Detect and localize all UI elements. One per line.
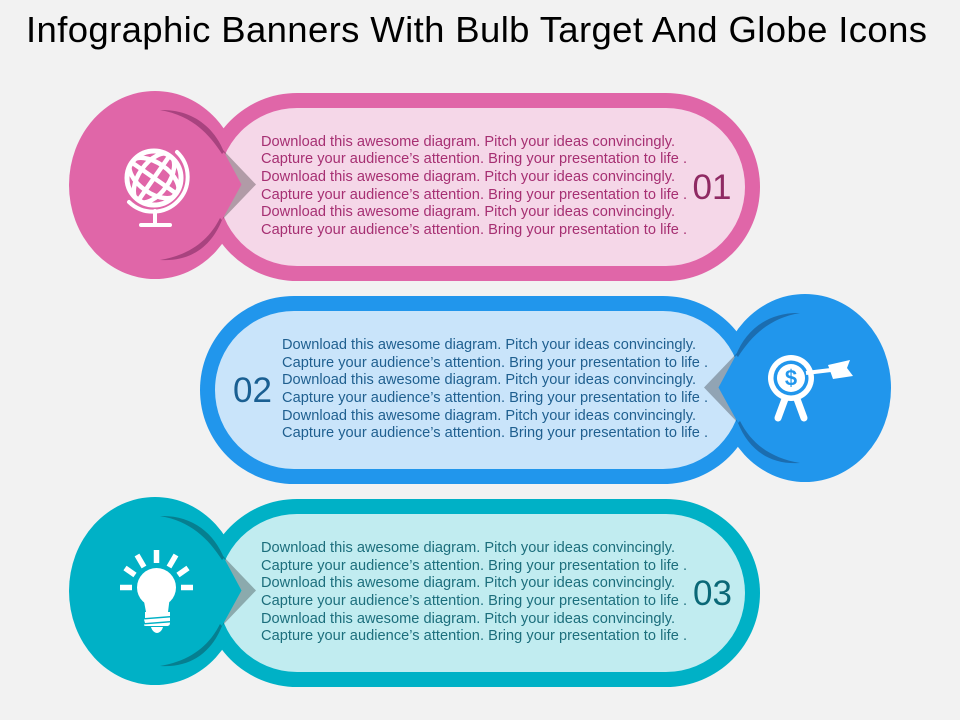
crescent shadows <box>160 516 224 666</box>
text block: Capture your audience’s attention. Bring your presentation to life . <box>282 425 708 441</box>
panel: banner 02 target <box>200 294 891 484</box>
badge pointer <box>205 546 242 636</box>
text block: Capture your audience’s attention. Bring your presentation to life . <box>282 390 708 406</box>
panel: banner 01 globe <box>69 91 760 281</box>
inner pill <box>218 108 745 266</box>
outer pill <box>203 499 760 687</box>
text block: Download this awesome diagram. Pitch your ideas convincingly. <box>282 408 696 424</box>
badge pointer <box>718 343 755 433</box>
number 02: 02 <box>233 371 272 410</box>
panel: banner 03 bulb <box>69 497 760 687</box>
grey arrow shadow <box>221 150 256 221</box>
icon: globe <box>124 148 190 227</box>
number 03: 03 <box>693 574 732 613</box>
text block: Capture your audience’s attention. Bring your presentation to life . <box>261 187 687 203</box>
text block <box>261 540 687 644</box>
badge pointer <box>205 140 242 230</box>
text block: Download this awesome diagram. Pitch your ideas convincingly. <box>282 372 696 388</box>
grey arrow shadow <box>221 556 256 627</box>
text block: Download this awesome diagram. Pitch your ideas convincingly. <box>261 540 675 556</box>
crescent shadows <box>736 313 800 463</box>
text block: Download this awesome diagram. Pitch your ideas convincingly. <box>261 134 675 150</box>
crescent shadows <box>160 110 224 260</box>
text block: Download this awesome diagram. Pitch your ideas convincingly. <box>261 204 675 220</box>
icon: target with dart <box>768 355 853 418</box>
outer pill <box>203 93 760 281</box>
grey arrow shadow <box>704 353 739 424</box>
text block: Download this awesome diagram. Pitch your ideas convincingly. <box>261 575 675 591</box>
outer pill <box>200 296 757 484</box>
inner pill <box>215 311 742 469</box>
badge circle <box>69 91 241 279</box>
icon: light bulb <box>120 550 193 633</box>
text block <box>261 134 687 238</box>
text block: Download this awesome diagram. Pitch your ideas convincingly. <box>282 337 696 353</box>
text block: Download this awesome diagram. Pitch your ideas convincingly. <box>261 169 675 185</box>
badge circle <box>719 294 891 482</box>
badge circle <box>69 497 241 685</box>
text block: Capture your audience’s attention. Bring your presentation to life . <box>261 151 687 167</box>
text block: Download this awesome diagram. Pitch your ideas convincingly. <box>261 611 675 627</box>
icon: target with dart: $ <box>785 366 797 390</box>
title: Infographic Banners With Bulb Target And Globe Icons <box>26 9 927 50</box>
text block: Capture your audience’s attention. Bring your presentation to life . <box>261 628 687 644</box>
text block: Capture your audience’s attention. Bring your presentation to life . <box>261 593 687 609</box>
text block: Capture your audience’s attention. Bring your presentation to life . <box>261 558 687 574</box>
number 01: 01 <box>692 168 731 207</box>
text block: Capture your audience’s attention. Bring your presentation to life . <box>282 355 708 371</box>
text block: Capture your audience’s attention. Bring your presentation to life . <box>261 222 687 238</box>
text block <box>282 337 708 441</box>
inner pill <box>218 514 745 672</box>
